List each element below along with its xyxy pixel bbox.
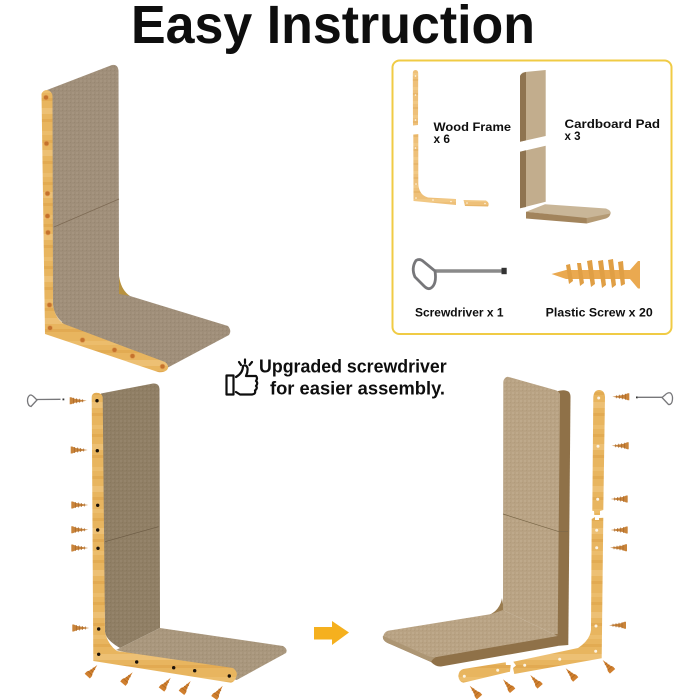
parts list panel (392, 60, 672, 334)
assembled stand illustration (42, 65, 230, 372)
front foot wood piece (458, 662, 511, 683)
floor pad left rounded edge (383, 636, 438, 662)
wood frame quantity: x 6 (434, 132, 450, 146)
assembled wood frame (92, 393, 237, 683)
upper wood strip (592, 390, 605, 515)
plastic screw label: Plastic Screw x 20 (546, 306, 653, 320)
arrow (314, 621, 349, 645)
back scratching pad (101, 383, 160, 648)
pad seam (105, 527, 158, 542)
upgraded screwdriver callout (226, 357, 447, 398)
pad seam (54, 199, 119, 227)
callout text line two: for easier assembly. (270, 378, 445, 398)
floor pad front edge (383, 634, 558, 667)
wood side frame (42, 90, 168, 372)
small screwdriver (636, 393, 673, 405)
pad fillet (489, 598, 505, 616)
back pad side edge (556, 390, 570, 646)
floor scratching pad (116, 628, 287, 680)
frame screw heads (44, 95, 165, 369)
screwdriver label: Screwdriver x 1 (415, 306, 504, 320)
pad seam (503, 514, 568, 532)
cardboard pad middle (520, 146, 546, 208)
cardboard pad upper (520, 70, 546, 142)
screws (467, 393, 629, 699)
wood frame label: Wood Frame (434, 120, 511, 134)
cardboard pad quantity: x 3 (564, 129, 581, 143)
callout text line one: Upgraded screwdriver (259, 357, 447, 377)
back pad face (503, 377, 560, 636)
exploded view: wood frame removed (383, 377, 673, 699)
cardboard pad floor (526, 204, 611, 224)
frame screw holes (95, 399, 231, 678)
floor pad top (383, 610, 558, 657)
screws (70, 397, 226, 700)
lower L wood frame (513, 517, 603, 674)
icon: thumbs up (226, 360, 257, 394)
cardboard pad label: Cardboard Pad (564, 117, 660, 131)
exploded view: wood frame front (28, 383, 287, 700)
floor scratching pad (60, 294, 230, 368)
back scratching pad (47, 65, 130, 322)
panel border (392, 60, 672, 334)
pad fillet (119, 276, 130, 296)
screwdriver part (413, 260, 507, 289)
wood frame parts (413, 70, 489, 206)
small screwdriver (28, 395, 64, 406)
plastic screw part (552, 259, 640, 288)
frame holes (463, 396, 600, 678)
